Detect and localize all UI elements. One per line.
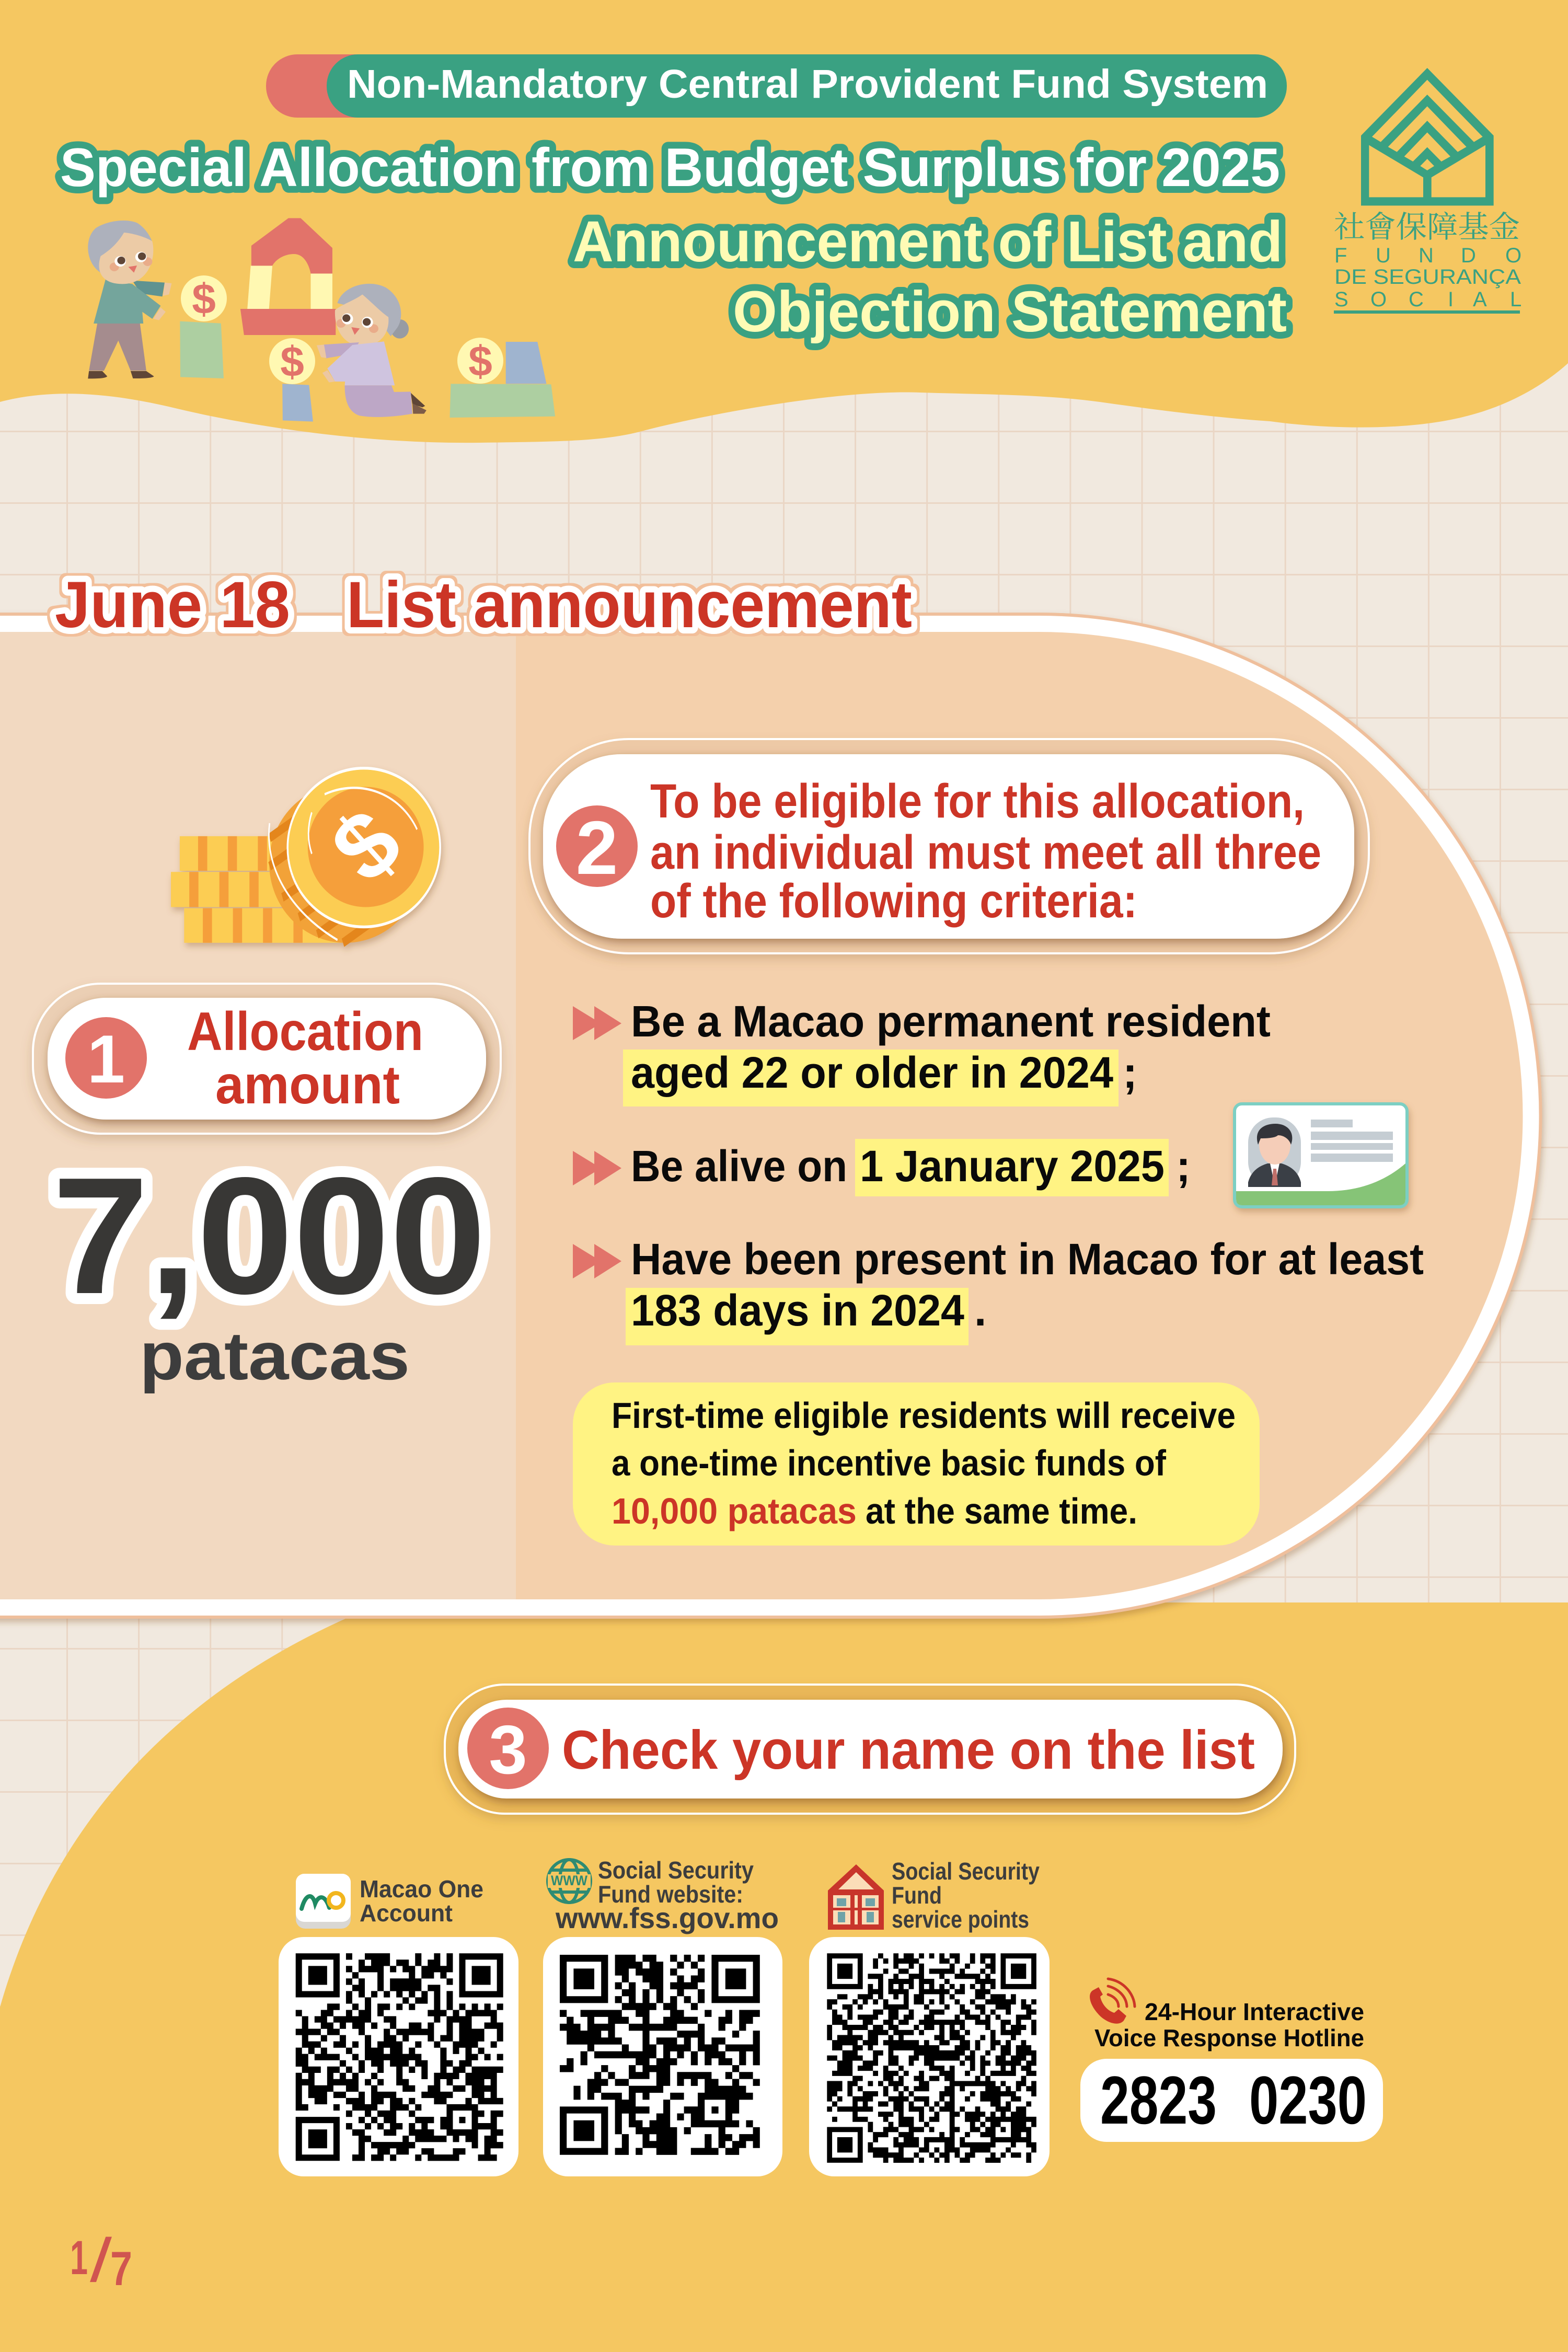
hotline: 2823	[1100, 2062, 1217, 2138]
pill 1: Allocation amount: Allocation	[187, 1001, 423, 1062]
illustration: elderly couple with blocks and coins	[88, 218, 555, 422]
red and cream arch blocks	[240, 218, 336, 335]
icon: globe www	[548, 1860, 591, 1903]
icon: Macao One app	[296, 1874, 351, 1929]
pill 2: eligibility heading: an individual must meet all three	[650, 826, 1321, 879]
label: Social Security Fund service points	[828, 1858, 1040, 1933]
badge 3	[467, 1708, 549, 1789]
criterion 1: aged 22 or older in 2024	[631, 1048, 1113, 1097]
grandmother	[317, 284, 426, 417]
pill 3: Check your name on the list	[445, 1685, 1295, 1814]
pill 2: eligibility heading: of the following criteria:	[650, 874, 1137, 928]
top yellow wave header	[0, 0, 1568, 443]
badge 1	[65, 1017, 147, 1099]
hotline: Voice Response Hotline	[1094, 2024, 1364, 2051]
criterion 1: ;	[1123, 1048, 1137, 1097]
logo: Fundo de Segurança Social: 社會保障基金	[1334, 202, 1520, 246]
hotline: 24-Hour Interactive	[1145, 1998, 1364, 2025]
bottom yellow section	[0, 1602, 1568, 2352]
pill 2: eligibility heading	[529, 739, 1369, 953]
green block	[180, 321, 224, 378]
label: Macao One Account: Macao One	[360, 1875, 483, 1903]
title	[60, 137, 1287, 344]
page number 1/7: 1	[70, 2231, 88, 2285]
coin icons: $	[468, 338, 492, 385]
criterion 2: 1 January 2025	[860, 1142, 1165, 1191]
criterion 3: .	[974, 1286, 986, 1335]
label: Social Security Fund service points: Fund	[892, 1882, 942, 1909]
amount: 7,000 patacas: 7,000	[52, 1143, 486, 1329]
logo: Fundo de Segurança Social: DE SEGURANÇA	[1334, 266, 1521, 289]
icon: globe www: WWW	[551, 1873, 587, 1888]
icon: phone	[1090, 1979, 1135, 2024]
grandfather	[88, 221, 171, 378]
criterion 2	[573, 1139, 1191, 1196]
label: Social Security Fund website: Social Security	[598, 1857, 754, 1884]
criterion 3: Have been present in Macao for at least	[631, 1235, 1424, 1284]
blue and green blocks	[282, 342, 555, 422]
logo: Fundo de Segurança Social: SOCIAL	[1334, 288, 1521, 311]
callout: first-time eligible residents: a one-time incentive basic funds of	[612, 1443, 1167, 1483]
criterion 1	[573, 997, 1271, 1106]
page number 1/7: /	[90, 2226, 112, 2295]
hotline	[1080, 1979, 1383, 2142]
icon: stack of gold coins: $	[312, 789, 421, 902]
label: Macao One Account	[296, 1874, 483, 1929]
logo: Fundo de Segurança Social: FUNDO	[1334, 244, 1521, 267]
pill 2: eligibility heading: To be eligible for this allocation,	[650, 775, 1305, 828]
criterion 1: Be a Macao permanent resident	[631, 997, 1271, 1046]
pill 3: Check your name on the list: Check your name on the list	[562, 1720, 1255, 1781]
hotline: 0230	[1249, 2062, 1367, 2138]
badge 3: 3	[489, 1711, 527, 1788]
main panel	[0, 632, 1523, 1599]
criterion 3	[573, 1235, 1424, 1345]
criterion 2: ;	[1176, 1142, 1191, 1191]
callout: first-time eligible residents: First-time eligible residents will receive	[612, 1395, 1236, 1436]
icon: double arrow	[573, 1006, 621, 1040]
heading: June 18 List announcement	[55, 569, 912, 641]
pill 1: Allocation amount	[33, 984, 501, 1134]
pill 1: Allocation amount: amount	[215, 1055, 400, 1115]
label: Social Security Fund website: www.fss.gov.mo	[555, 1901, 779, 1934]
criterion 3: 183 days in 2024	[631, 1286, 964, 1335]
QR card: Macao One	[279, 1937, 518, 2176]
coin icons	[181, 275, 503, 386]
program pill: Non-Mandatory Central Provident Fund System	[266, 54, 1287, 118]
icon: ID card	[1235, 1104, 1407, 1207]
QR card: service points	[809, 1937, 1050, 2176]
icon: double arrow	[573, 1151, 621, 1185]
icon: building	[828, 1864, 884, 1930]
label: Social Security Fund website	[548, 1857, 779, 1934]
label: Social Security Fund service points: service points	[892, 1906, 1029, 1933]
logo: Fundo de Segurança Social	[1334, 68, 1521, 314]
title: Objection Statement	[733, 280, 1287, 344]
heading: June 18 List announcement: June 18	[55, 569, 290, 641]
coin icons: $	[192, 275, 216, 323]
badge 2	[556, 805, 638, 890]
heading: June 18 List announcement: List announcement	[347, 569, 912, 641]
callout: first-time eligible residents: 10,000 patacas	[612, 1491, 857, 1531]
icon: double arrow	[573, 1244, 621, 1278]
QR card: website	[543, 1937, 782, 2176]
amount: 7,000 patacas: patacas	[140, 1318, 410, 1394]
callout: first-time eligible residents: at the same time.	[866, 1491, 1137, 1531]
coin icons: $	[280, 338, 304, 386]
callout: first-time eligible residents	[573, 1382, 1260, 1546]
page number 1/7	[70, 2226, 132, 2296]
label: Macao One Account: Account	[360, 1899, 453, 1927]
icon: stack of gold coins	[171, 768, 440, 943]
label: Social Security Fund website: Fund website:	[598, 1881, 743, 1908]
title: Special Allocation from Budget Surplus for 2025	[60, 137, 1280, 198]
badge 1: 1	[87, 1021, 125, 1097]
criterion 2: Be alive on	[631, 1142, 847, 1191]
program pill: Non-Mandatory Central Provident Fund System: Non-Mandatory Central Provident Fund System	[347, 62, 1268, 107]
badge 2: 2	[576, 805, 618, 890]
page number 1/7: 7	[110, 2242, 132, 2296]
label: Social Security Fund service points: Social Security	[892, 1858, 1040, 1885]
title: Announcement of List and	[573, 210, 1283, 274]
